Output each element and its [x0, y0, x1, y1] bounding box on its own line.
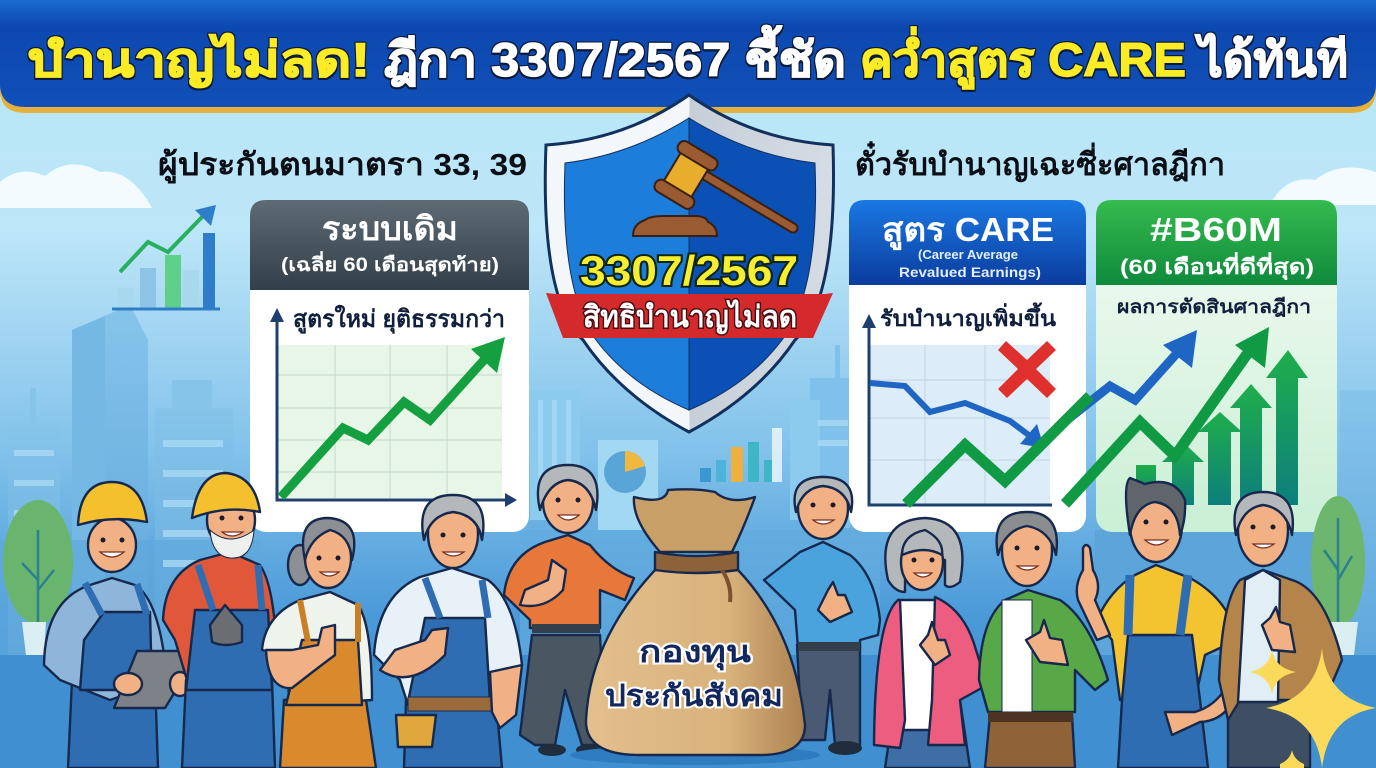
- caption: ผลการตัดสินศาลฎีกา: [1117, 296, 1311, 318]
- arrowheads: [1163, 327, 1269, 368]
- icon: gavel: [633, 139, 793, 236]
- background clouds: [0, 164, 1376, 208]
- icon: red cross: [998, 341, 1056, 398]
- person: worker with tablet: [44, 482, 200, 768]
- big growth arrows across panels: [906, 350, 1250, 504]
- bag label: ประกันสังคม: [605, 680, 783, 713]
- title: บำนาญไม่ลด!: [28, 32, 370, 88]
- panel heading: สูตร CARE: [882, 211, 1054, 251]
- caption: สูตรใหม่ ยุติธรรมกว่า: [293, 304, 505, 335]
- bag label: กองทุน: [639, 636, 752, 671]
- title: คว่ำสูตร CARE: [860, 26, 1186, 90]
- title: [28, 25, 1348, 90]
- ribbon: [546, 293, 833, 338]
- panel subheading: (Career Average: [918, 247, 1018, 262]
- icon: sparkles: [1250, 648, 1376, 768]
- icon: right tree: [1311, 496, 1365, 655]
- caption: รับบำนาญเพิ่มขึ้น: [880, 302, 1056, 332]
- icon: small pie chart: [604, 451, 646, 493]
- line chart: falling: [862, 314, 1052, 505]
- header banner: [0, 0, 1376, 113]
- person: worker with tool belt: [374, 495, 522, 768]
- title: ฎีกา 3307/2567 ชี้ชัด: [384, 25, 846, 86]
- panel: old system: [250, 200, 529, 532]
- person: man in green shirt: [979, 512, 1108, 768]
- person: worker with beard: [163, 473, 277, 768]
- rising arrow bars: [1136, 350, 1308, 505]
- panel heading: #B60M: [1150, 211, 1282, 248]
- panel heading: ระบบเดิม: [322, 210, 458, 247]
- right subheading: ตั๋วรับบำนาญเฉะซี่ะศาลฎีกา: [855, 140, 1225, 183]
- shield emblem: [545, 95, 834, 432]
- bag label: [605, 636, 783, 713]
- money bag: [570, 489, 820, 765]
- icon: growth bar chart: [112, 205, 220, 309]
- panel subheading: (60 เดือนที่ดีที่สุด): [1120, 251, 1314, 281]
- building windows: [14, 400, 848, 567]
- title: ได้ทันที: [1194, 32, 1348, 86]
- line chart: rising: [270, 308, 517, 507]
- person: man in orange shirt: [504, 465, 634, 756]
- person: man in yellow shirt: [1077, 478, 1240, 768]
- background city skyline: [0, 305, 1376, 768]
- ribbon: สิทธิบำนาญไม่ลด: [583, 299, 797, 335]
- person: woman in orange overalls: [262, 518, 376, 768]
- person: man in blue shirt: [764, 477, 880, 755]
- icon: small bars: [700, 428, 782, 482]
- person: man in brown jacket: [1219, 492, 1342, 768]
- person: woman in pink: [874, 518, 987, 768]
- icon: left tree: [3, 500, 73, 655]
- panel: CARE formula: Revalued Earnings): [899, 265, 1041, 280]
- panel: B60M: [1096, 200, 1337, 532]
- panel: CARE formula: [849, 200, 1086, 532]
- left subheading: ผู้ประกันตนมาตรา 33, 39: [158, 147, 527, 184]
- panel subheading: (เฉลี่ย 60 เดือนสุดท้าย): [281, 251, 499, 277]
- case number: 3307/2567: [580, 247, 798, 294]
